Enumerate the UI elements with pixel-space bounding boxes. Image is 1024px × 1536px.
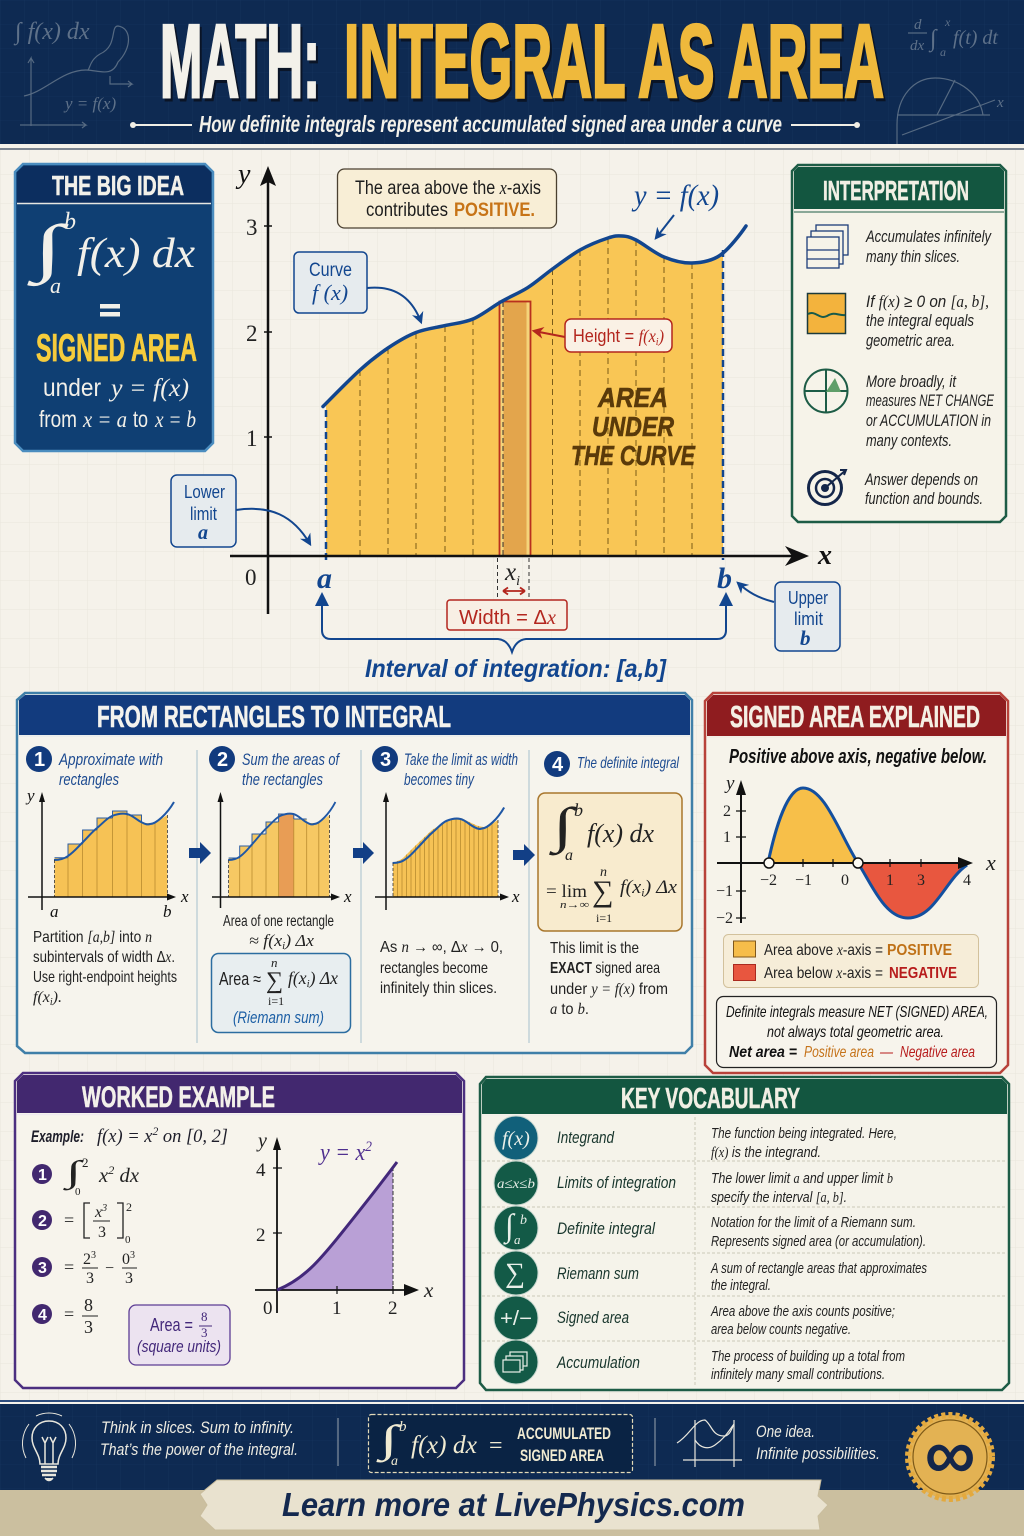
closing line (756, 1422, 880, 1463)
text: a to b. (550, 1001, 589, 1018)
step 3 formula: 0 (122, 1251, 130, 1268)
Riemann sum box (212, 954, 350, 1032)
footer link text: Learn more at LivePhysics.com (282, 1486, 745, 1523)
definite integral box: f(x) dx (587, 819, 654, 848)
chart: signed area: −2 (716, 910, 733, 927)
Riemann sum box: (Riemann sum) (233, 1008, 324, 1027)
example statement: f(x) = x (97, 1126, 154, 1147)
legend (724, 934, 978, 988)
closing line: Infinite possibilities. (756, 1444, 880, 1463)
text: EXACT signed area (550, 960, 660, 977)
step 1 formula: 1 (38, 1167, 47, 1184)
row: definite integral: a (514, 1232, 521, 1247)
area label (571, 382, 696, 471)
formula box (368, 1414, 632, 1472)
area result box (129, 1305, 230, 1365)
note box (716, 996, 996, 1068)
text: ≈ f(x (249, 931, 280, 950)
area result box: 3 (201, 1325, 208, 1340)
interval brace (315, 592, 733, 652)
row: Riemann sum: the integral. (711, 1277, 771, 1294)
chart: y = x squared: 2 (365, 1139, 372, 1155)
area result box: (square units) (137, 1337, 221, 1356)
right chalk sketch: d (914, 17, 922, 33)
text: Partition [a,b] into n (33, 929, 152, 946)
width marker: i (516, 574, 520, 589)
row: Riemann sum: A sum of rectangle areas that approximates (710, 1260, 927, 1277)
area label: AREA (597, 382, 668, 413)
step 4 formula: 4 (38, 1307, 47, 1324)
under text: under (43, 374, 101, 402)
chart: rectangles: b (163, 902, 172, 921)
width marker (447, 558, 567, 630)
step 1 formula: 2 (108, 1163, 114, 1177)
item text: the integral equals (866, 312, 974, 330)
text (380, 939, 503, 997)
row: definite integral (494, 1206, 926, 1250)
definite integral box: a (565, 847, 573, 864)
title (160, 4, 884, 120)
axes: y (235, 159, 251, 190)
Riemann sum box: i (307, 978, 310, 990)
callout: curve (294, 252, 421, 322)
row: definite integral: b (520, 1213, 527, 1228)
seal badge (908, 1415, 992, 1499)
item text: many thin slices. (866, 248, 960, 266)
subtitle: How definite integrals represent accumulated signed area under a curve (199, 111, 782, 137)
chart: signed area (716, 773, 996, 927)
width marker: Width = Δx (459, 607, 556, 629)
formula: f(x) dx (77, 231, 195, 277)
chart: thin slices (375, 792, 520, 910)
row: integrand: f(x) (502, 1128, 530, 1150)
step 1 formula: 2 (82, 1155, 88, 1170)
chart: highlighted rectangle: x (343, 887, 352, 906)
right chalk sketch: x (944, 15, 951, 29)
Riemann sum box: Area ≈ (219, 969, 261, 989)
note box: — (879, 1044, 894, 1061)
chart: signed area: −2 (760, 872, 777, 889)
formula box: ACCUMULATED (517, 1424, 611, 1443)
callout: lower limit (171, 475, 310, 547)
legend: POSITIVE (887, 942, 952, 959)
Riemann sum box: i=1 (268, 994, 284, 1008)
callout: positive: contributes (366, 200, 448, 221)
right chalk sketch: x (996, 95, 1004, 111)
width marker: x (505, 559, 516, 586)
row: signed area: +/− (500, 1308, 532, 1330)
row: integrand: The function being integrated. Here, (711, 1125, 897, 1142)
callout: upper limit (738, 582, 840, 651)
item text (865, 228, 992, 266)
chart: signed area: 2 (723, 803, 731, 820)
callout: height (534, 319, 672, 352)
example statement: 2 (152, 1124, 158, 1138)
label: a and b: a (317, 562, 332, 595)
item text (866, 373, 995, 450)
note box: not always total geometric area. (767, 1024, 944, 1041)
footer band (0, 1400, 1024, 1536)
icon: mini graph (677, 1420, 742, 1467)
chart: y = x squared: 1 (332, 1298, 342, 1319)
step 3 formula (32, 1250, 137, 1287)
row: integrand (494, 1116, 897, 1161)
callout: positive (338, 169, 556, 228)
item text: More broadly, it (866, 373, 957, 391)
item text (864, 471, 983, 508)
curve (323, 226, 746, 406)
label: y=f(x) with arrow (631, 179, 719, 238)
step 2: the rectangles (242, 770, 323, 789)
item text: many contexts. (866, 432, 952, 450)
step 1: 1 (34, 749, 45, 771)
callout: positive: POSITIVE. (454, 200, 535, 221)
row: limits (494, 1161, 893, 1206)
step 2 formula: 0 (125, 1234, 131, 1246)
row: Riemann sum: ∑ (505, 1258, 525, 1289)
under text (39, 374, 196, 432)
row: limits: Limits of integration (557, 1173, 676, 1192)
step 1 formula: ∫ (62, 1154, 85, 1191)
left chalk sketch: ∫ f(x) dx (13, 19, 90, 46)
step 2 formula (32, 1200, 132, 1246)
step 2 formula: 3 (98, 1224, 106, 1241)
step 4 formula: 3 (84, 1317, 93, 1337)
note box: Positive area (804, 1044, 874, 1061)
title: MATH: (160, 4, 320, 120)
step 1 formula: 0 (75, 1186, 81, 1198)
chart: y = x squared: 2 (388, 1298, 398, 1319)
text: Area of one rectangle (223, 913, 334, 930)
definite integral box (538, 793, 682, 931)
under text: x = a (82, 407, 127, 432)
ribbon (200, 1480, 828, 1530)
chart: thin slices: x (511, 887, 520, 906)
definite integral box: i (641, 887, 644, 899)
chart: y = x squared: y (256, 1130, 267, 1152)
callout: upper limit: Upper (788, 588, 828, 608)
formula box: = (489, 1433, 503, 1459)
icon: circle with triangle (804, 369, 848, 413)
callout: upper limit: b (800, 626, 810, 650)
step 3 formula: − (105, 1260, 114, 1277)
arrow (189, 842, 211, 864)
step 1 (25, 746, 189, 1008)
item text: Accumulates infinitely (865, 228, 992, 246)
panel: signed area explained (705, 693, 1008, 1073)
closing line: One idea. (756, 1422, 815, 1441)
text: As n → ∞, Δx → 0, (380, 939, 503, 956)
row: definite integral: Represents signed area (or accumulation). (711, 1233, 926, 1250)
chart: y = x squared: 0 (263, 1298, 272, 1319)
definite integral box: i=1 (596, 911, 612, 925)
chart: rectangles: y (25, 786, 35, 805)
chart: signed area: 3 (917, 872, 925, 889)
chart: signed area: y (724, 773, 735, 794)
icon: stacked slices (807, 225, 848, 268)
row: limits: The lower limit a and upper limit b (711, 1170, 893, 1187)
step 2 formula: 3 (101, 1203, 107, 1214)
chart: y = x squared: 2 (256, 1225, 266, 1246)
signed area: SIGNED AREA (36, 327, 197, 370)
panel: worked example (15, 1073, 464, 1388)
item text: If f(x) ≥ 0 on [a, b], (866, 292, 989, 311)
Riemann sum box: f(x (288, 968, 307, 988)
area fill (323, 226, 746, 556)
item text: geometric area. (866, 332, 955, 350)
example statement: Example: (31, 1127, 84, 1146)
example statement (31, 1124, 228, 1147)
header banner (0, 0, 1024, 150)
step 2 formula: = (64, 1210, 74, 1230)
row: signed area: Signed area (557, 1308, 629, 1327)
item text: function and bounds. (865, 490, 983, 508)
definite integral box: = lim (546, 881, 587, 901)
row: accumulation (494, 1340, 905, 1384)
chart: signed area: x (985, 850, 996, 875)
row: definite integral: ∫ (503, 1207, 516, 1245)
heading: FROM RECTANGLES TO INTEGRAL (97, 699, 451, 734)
Riemann sum box: ) Δx (309, 968, 338, 989)
definite integral box: b (574, 800, 583, 820)
step 1 formula (32, 1154, 139, 1198)
Riemann sum box: n (271, 955, 278, 970)
definite integral box: n (600, 865, 607, 880)
step 3 formula: 3 (91, 1250, 96, 1261)
step 3 formula: 3 (86, 1270, 94, 1287)
formula (26, 209, 195, 316)
row: limits: a≤x≤b (497, 1177, 535, 1192)
main area chart (171, 159, 840, 683)
bounds dashed lines (326, 250, 723, 560)
text: i (50, 997, 53, 1008)
chart: signed area: 0 (841, 872, 849, 889)
definite integral box: f(x (620, 877, 640, 898)
callout: curve: Curve (309, 260, 352, 281)
left chalk sketch: y = f(x) (63, 94, 116, 113)
step 1: rectangles (59, 770, 119, 789)
row: signed area: Area above the axis counts positive; (710, 1303, 895, 1320)
under text: x = b (154, 407, 196, 432)
note box: Negative area (900, 1044, 975, 1061)
right chalk sketch: f(t) dt (953, 27, 998, 49)
formula box: b (399, 1419, 407, 1435)
row: accumulation: The process of building up a total from (711, 1348, 905, 1365)
text: subintervals of width Δx. (33, 949, 175, 966)
step 2 formula: 2 (126, 1200, 132, 1214)
step 2 (209, 746, 352, 1032)
chart: rectangles: x (180, 887, 189, 906)
step 3: Take the limit as width (404, 750, 518, 769)
formula box: SIGNED AREA (520, 1446, 604, 1465)
text: i (282, 941, 285, 952)
area result box: Area = (150, 1315, 193, 1335)
label: y=f(x) with arrow: y = f(x) (631, 179, 719, 212)
arrow (353, 842, 374, 864)
text: under y = f(x) from (550, 981, 668, 998)
callout: lower limit: limit (190, 504, 217, 524)
chart: signed area: 4 (963, 872, 971, 889)
tagline: That’s the power of the integral. (100, 1440, 298, 1459)
text: Use right-endpoint heights (33, 969, 177, 986)
callout: height: Height = f(x (573, 326, 658, 346)
row: accumulation: Accumulation (556, 1353, 640, 1372)
highlighted slice (500, 302, 530, 556)
item text: Answer depends on (864, 471, 978, 489)
text: f(x (33, 989, 50, 1006)
row: signed area: area below counts negative. (711, 1321, 851, 1338)
icon: light bulb (22, 1413, 76, 1480)
step 4 (538, 751, 682, 1018)
formula box: a (391, 1454, 398, 1469)
chart: highlighted rectangle (212, 792, 352, 908)
text: infinitely thin slices. (380, 980, 497, 997)
under text: from (39, 406, 77, 432)
step 2: Sum the areas of (242, 750, 341, 769)
panel: the big idea (15, 164, 213, 451)
definite integral box: ∑ (592, 875, 613, 908)
formula box: ∫ (377, 1418, 402, 1463)
row: definite integral: Definite integral (557, 1219, 656, 1238)
step 2 formula: x (95, 1204, 102, 1221)
interval label: Interval of integration: [a,b] (365, 655, 668, 683)
step 4 formula: 8 (84, 1295, 93, 1315)
step 3 formula: 2 (83, 1251, 91, 1268)
axes (230, 159, 832, 614)
callout: height: ) (658, 326, 664, 347)
item text (866, 292, 989, 350)
row: limits: specify the interval [a, b]. (711, 1189, 847, 1206)
label: a and b: b (717, 562, 732, 595)
axes: 1 (246, 426, 258, 451)
callout: positive: The area above the x-axis (355, 178, 541, 199)
chart: y = x squared: y = x (320, 1140, 370, 1166)
axes: 3 (246, 215, 258, 240)
arrow (513, 844, 535, 866)
legend: Area below x-axis = (764, 965, 883, 982)
chart: rectangles: a (50, 902, 58, 921)
step 3: becomes tiny (404, 770, 475, 789)
step 3: 3 (380, 749, 391, 771)
callout: lower limit: Lower (184, 482, 225, 502)
chart: rectangles (25, 786, 189, 921)
right chalk sketch: a (940, 45, 946, 59)
text: This limit is the (550, 940, 639, 957)
formula: a (50, 273, 61, 298)
legend: NEGATIVE (889, 965, 957, 982)
under text: to (133, 406, 148, 432)
area label: THE CURVE (571, 440, 696, 471)
row: definite integral: Notation for the limit of a Riemann sum. (711, 1214, 916, 1231)
axes: 2 (246, 321, 258, 346)
heading: KEY VOCABULARY (621, 1083, 800, 1115)
step 1 formula: x (99, 1165, 108, 1187)
step 3 formula: 3 (38, 1260, 47, 1277)
row: integrand: Integrand (557, 1128, 614, 1147)
step 1 formula: dx (114, 1165, 139, 1187)
step 3 formula: = (64, 1257, 74, 1277)
callout: upper limit: limit (794, 609, 823, 629)
step 2: 2 (217, 749, 228, 771)
legend: Area above x-axis = (764, 942, 883, 959)
text: ). (52, 989, 62, 1006)
axes: 0 (245, 565, 256, 590)
chart: signed area: 1 (723, 829, 731, 846)
row: Riemann sum: Riemann sum (557, 1264, 639, 1283)
text: rectangles become (380, 960, 488, 977)
formula: ∫ (26, 212, 69, 287)
chart: y = x squared: x (423, 1278, 434, 1302)
chart: y = x squared (255, 1130, 434, 1319)
step 2 formula: 2 (38, 1213, 47, 1230)
area result box: 8 (201, 1309, 208, 1324)
icon: area box (808, 294, 846, 334)
row: signed area (494, 1296, 895, 1340)
chart: signed area: −1 (795, 872, 812, 889)
chart: signed area: 1 (886, 872, 894, 889)
right chalk sketch (897, 15, 1004, 144)
text (33, 929, 177, 1008)
step 3 formula: 3 (125, 1270, 133, 1287)
chart: signed area: −1 (716, 883, 733, 900)
step 3 formula: 3 (130, 1250, 135, 1261)
chart: y = x squared: 4 (256, 1160, 266, 1181)
callout: curve: f (x) (312, 280, 348, 305)
callout: lower limit: a (198, 522, 208, 544)
definite integral box: n→∞ (560, 899, 589, 911)
step 4 formula (32, 1295, 98, 1337)
step 4 formula: = (64, 1304, 74, 1324)
axes: x (817, 540, 832, 571)
seal badge: ∞ (925, 1417, 975, 1491)
example statement: on [0, 2] (158, 1126, 228, 1147)
under text: y = f(x) (108, 375, 189, 402)
step 3 (372, 746, 520, 997)
step 4: The definite integral (577, 755, 679, 772)
text (550, 940, 668, 1018)
row: integrand: f(x) is the integrand. (711, 1144, 821, 1161)
icon: target (808, 470, 846, 504)
heading: WORKED EXAMPLE (82, 1081, 275, 1114)
panel: from rectangles to integral (17, 693, 692, 1053)
area label: UNDER (592, 411, 675, 442)
tagline: Think in slices. Sum to infinity. (101, 1418, 294, 1437)
callout: height: i (656, 336, 659, 348)
row: accumulation: infinitely many small contributions. (711, 1366, 885, 1383)
formula: b (64, 209, 76, 235)
left chalk sketch (13, 19, 132, 128)
text (223, 913, 334, 952)
definite integral box: ∫ (549, 797, 578, 856)
Riemann sum box: ∑ (266, 968, 283, 994)
panel: interpretation (792, 165, 1006, 522)
step 1: Approximate with (58, 750, 163, 769)
note box: Net area = (729, 1044, 797, 1061)
heading: THE BIG IDEA (52, 170, 184, 201)
definite integral box: ) Δx (643, 877, 678, 898)
text: ) Δx (284, 931, 315, 950)
formula box: f(x) dx (411, 1432, 477, 1459)
panel: key vocabulary (480, 1077, 1009, 1390)
row: Riemann sum (494, 1251, 927, 1295)
right chalk sketch: dx (910, 38, 924, 54)
label: a and b (317, 562, 732, 595)
right chalk sketch: ∫ (928, 26, 938, 53)
step 4: 4 (552, 754, 564, 776)
tagline (100, 1418, 298, 1459)
